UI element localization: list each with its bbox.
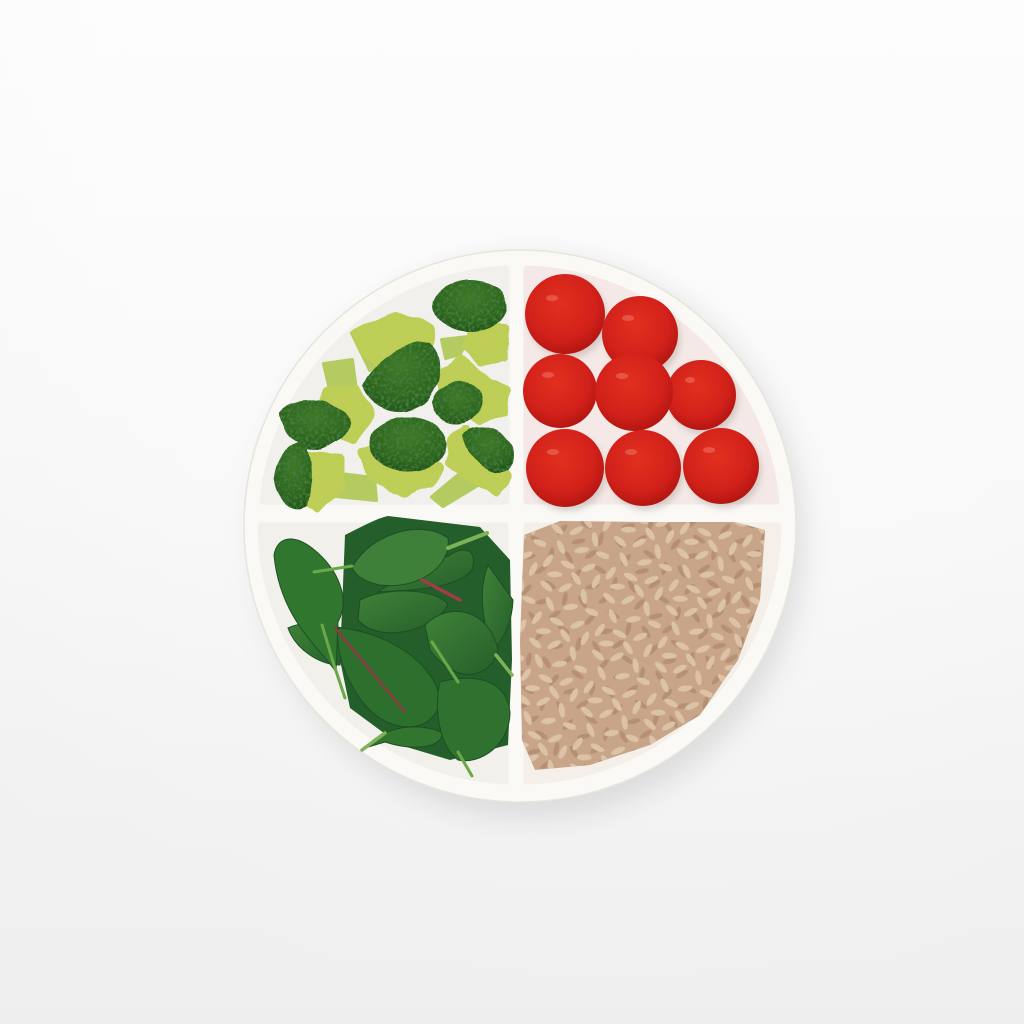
broccoli yellow florets: [301, 317, 507, 507]
rice light grains: [520, 521, 765, 770]
tomatoes: [523, 274, 761, 511]
broccoli: [274, 280, 513, 508]
tomato shadows: [529, 280, 761, 511]
spinach stems: [314, 533, 512, 776]
broccoli stems: [324, 324, 476, 506]
compartment: top right: [527, 269, 776, 501]
spinach leaves: [274, 529, 513, 761]
tomato highlights: [542, 295, 715, 455]
plate: [244, 250, 796, 802]
compartment: top left: [263, 269, 506, 501]
compartment: bottom right: [527, 526, 778, 781]
broccoli dark heads: [274, 280, 513, 508]
compartment: bottom left: [261, 526, 505, 781]
spinach: [274, 516, 513, 776]
spinach base layer: [340, 516, 512, 760]
rice mound: [520, 521, 765, 770]
rice: [520, 521, 765, 770]
rice dark grains: [520, 521, 765, 770]
plate shadow: [256, 258, 804, 818]
